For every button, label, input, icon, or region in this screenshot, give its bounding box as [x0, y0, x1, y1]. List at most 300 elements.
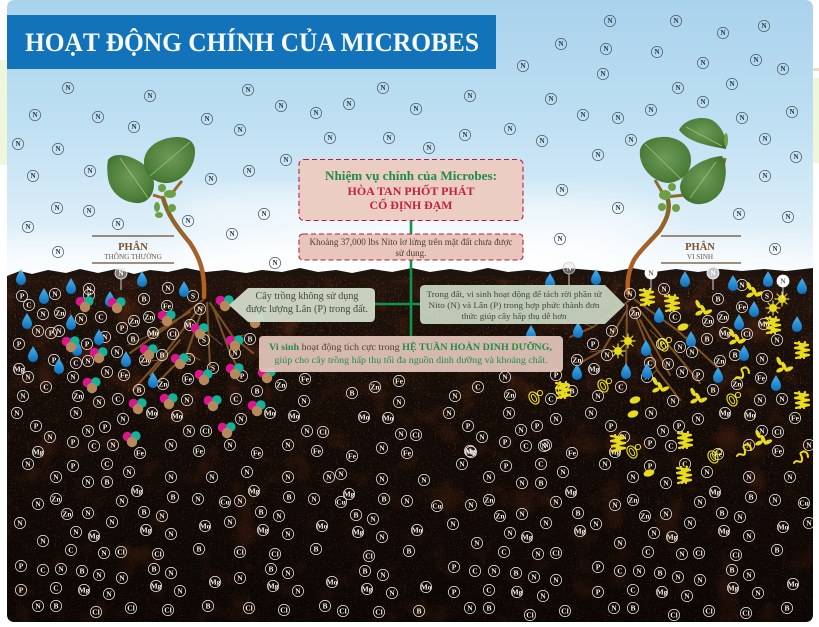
minerals in the soil: B — [715, 294, 721, 304]
minerals in the soil: N — [687, 518, 693, 528]
minerals in the soil: Zn — [276, 380, 286, 390]
minerals in the soil: C — [618, 382, 624, 392]
minerals in the soil: N — [746, 570, 752, 580]
minerals in the soil: N — [168, 472, 174, 482]
minerals in the soil: Cl — [705, 606, 713, 616]
minerals in the soil: N — [184, 396, 190, 404]
minerals in the soil: N — [70, 372, 76, 382]
minerals in the soil: Mg — [657, 588, 668, 596]
minerals in the soil: N — [679, 368, 685, 376]
nitrogen atoms in the sky: N — [327, 134, 333, 142]
nitrogen atoms in the sky: N — [761, 22, 767, 30]
minerals in the soil: B — [704, 334, 710, 344]
nitrogen atoms in the sky: N — [30, 172, 36, 180]
minerals in the soil: N — [611, 604, 617, 612]
minerals in the soil: N — [404, 496, 410, 506]
minerals in the soil: N — [78, 314, 84, 324]
minerals in the soil: N — [96, 398, 102, 406]
minerals in the soil: C — [682, 460, 688, 468]
minerals in the soil: N — [679, 550, 685, 558]
nitrogen atoms in the sky: N — [615, 114, 621, 122]
minerals in the soil: P — [554, 370, 559, 380]
left plant — [107, 137, 204, 297]
minerals in the soil: Cl — [271, 550, 279, 558]
minerals in the soil: P — [591, 340, 596, 348]
minerals in the soil: N — [56, 326, 62, 336]
minerals in the soil: N — [85, 478, 91, 486]
minerals in the soil: B — [130, 334, 136, 344]
minerals in the soil: Mo — [383, 414, 394, 422]
minerals in the soil: Mo — [778, 522, 789, 532]
minerals in the soil: C — [501, 548, 507, 556]
minerals in the soil: B — [732, 350, 738, 360]
minerals in the soil: N — [746, 472, 752, 482]
arrow callout: unused phosphorus: được lượng Lân (P) trong đất. — [246, 304, 368, 315]
minerals in the soil: N — [209, 472, 215, 482]
minerals in the soil: N — [540, 592, 546, 600]
nitrogen atoms in the sky: N — [413, 105, 419, 113]
nitrogen atoms in the sky: N — [558, 40, 564, 48]
minerals in the soil: Mg — [79, 586, 90, 594]
minerals in the soil: N — [604, 350, 610, 360]
minerals in the soil: N — [119, 496, 125, 506]
minerals in the soil: N — [543, 440, 549, 450]
minerals in the soil: Zn — [718, 312, 728, 322]
minerals in the soil: N — [519, 478, 525, 488]
callout: nutrient cycle — [259, 336, 563, 372]
nitrogen atoms in the sky: N — [87, 167, 93, 175]
nitrogen atoms in the sky: N — [313, 109, 319, 117]
nitrogen atoms in the sky: N — [283, 156, 289, 164]
minerals in the soil: Mg — [210, 578, 221, 586]
minerals in the soil: N — [47, 432, 53, 442]
minerals in the soil: Mg — [89, 532, 100, 540]
minerals in the soil: N — [553, 576, 559, 584]
minerals in the soil: N — [502, 372, 508, 382]
minerals in the soil: C — [26, 300, 32, 310]
callout: nutrient cycle: Vi sinh hoạt động tích cực trong HỆ TUẦN HOÀN DINH DƯỠNG, — [269, 340, 553, 353]
minerals in the soil: Cl — [202, 426, 210, 436]
minerals in the soil: Mg — [249, 486, 260, 496]
minerals in the soil: N — [58, 564, 64, 574]
minerals in the soil: S — [202, 336, 206, 344]
minerals in the soil: B — [247, 334, 253, 344]
minerals in the soil: P — [452, 588, 457, 596]
water droplets — [16, 269, 807, 391]
minerals in the soil: Cl — [339, 606, 347, 616]
minerals in the soil: B — [170, 492, 176, 502]
minerals in the soil: B — [575, 508, 581, 518]
minerals in the soil: S — [187, 354, 191, 364]
minerals in the soil: N — [101, 548, 107, 558]
minerals in the soil: Mo — [317, 522, 328, 530]
nitrogen atoms in the sky: N — [272, 259, 278, 267]
minerals in the soil: Mg — [566, 488, 577, 496]
minerals in the soil: Zn — [62, 510, 72, 518]
minerals in the soil: N — [697, 576, 703, 584]
minerals in the soil: N — [186, 426, 192, 436]
minerals in the soil: N — [389, 588, 395, 598]
minerals in the soil: Mg — [33, 448, 44, 456]
minerals in the soil: B — [313, 544, 319, 554]
minerals in the soil: Zn — [129, 316, 139, 326]
callout: main mission: CỐ ĐỊNH ĐẠM — [370, 197, 452, 212]
minerals in the soil: N — [737, 512, 743, 522]
nitrogen atoms in the sky: N — [780, 65, 786, 73]
minerals in the soil: N — [227, 518, 233, 526]
sky background — [0, 0, 819, 284]
minerals in the soil: P — [19, 586, 24, 594]
minerals in the soil: N — [380, 570, 386, 580]
minerals in the soil: P — [696, 370, 701, 380]
minerals in the soil: C — [630, 586, 636, 594]
minerals in the soil: Mo — [289, 412, 300, 420]
minerals in the soil: N — [295, 586, 301, 596]
minerals in the soil: Cl — [319, 428, 327, 436]
minerals in the soil: P — [452, 562, 457, 572]
minerals in the soil: Zn — [73, 392, 83, 400]
leaves — [107, 155, 154, 203]
soil ground — [7, 268, 813, 622]
minerals in the soil: B — [141, 508, 147, 516]
minerals in the soil: C — [40, 566, 46, 574]
nitrogen atoms in the sky: N — [86, 207, 92, 215]
minerals in the soil: C — [645, 548, 651, 556]
minerals in the soil: Mo — [200, 522, 211, 530]
minerals in the soil: Zn — [51, 494, 61, 504]
minerals in the soil: N — [660, 426, 666, 436]
minerals in the soil: Fe — [568, 448, 577, 458]
minerals in the soil: N — [663, 510, 669, 518]
minerals in the soil: Zn — [640, 512, 650, 520]
minerals in the soil: Cl — [169, 330, 177, 338]
minerals in the soil: B — [79, 566, 85, 576]
minerals in the soil: N — [474, 538, 480, 548]
callout: main mission: HÒA TAN PHỐT PHÁT — [348, 183, 474, 198]
nitrogen pins entering the soil: N — [780, 276, 786, 286]
minerals in the soil: N — [621, 432, 627, 442]
label: regular fertilizer — [92, 236, 174, 263]
minerals in the soil: Mg — [667, 532, 678, 542]
minerals in the soil: N — [665, 360, 671, 368]
minerals in the soil: N — [644, 372, 650, 382]
minerals in the soil: C — [68, 546, 74, 554]
minerals in the soil: P — [17, 340, 22, 348]
nitrogen atoms in the sky: N — [462, 131, 468, 139]
minerals in the soil: B — [205, 602, 211, 610]
minerals in the soil: N — [602, 460, 608, 468]
minerals in the soil: N — [20, 392, 26, 400]
minerals in the soil: N — [197, 304, 203, 314]
minerals in the soil: Mg — [610, 448, 621, 456]
buds — [658, 133, 728, 212]
minerals in the soil: B — [657, 568, 663, 578]
callout: main mission: Nhiệm vụ chính của Microbes: — [325, 168, 497, 183]
minerals in the soil: C — [548, 394, 554, 404]
minerals in the soil: Mo — [327, 578, 338, 586]
label: regular fertilizer: THÔNG THƯỜNG — [104, 251, 162, 261]
minerals in the soil: C — [475, 382, 481, 392]
nitrogen atoms in the sky: N — [95, 113, 101, 121]
nitrogen atoms in the sky: N — [54, 204, 60, 212]
minerals in the soil: N — [52, 290, 58, 298]
minerals in the soil: Cl — [742, 608, 750, 618]
minerals in the soil: N — [689, 348, 695, 356]
minerals in the soil: Mo — [412, 526, 423, 534]
minerals in the soil: N — [120, 414, 126, 424]
nitrogen atoms in the sky: N — [261, 210, 267, 218]
minerals in the soil: N — [338, 470, 344, 478]
minerals in the soil: C — [617, 566, 623, 576]
minerals in the soil: C — [672, 312, 678, 322]
minerals in the soil: N — [396, 398, 402, 406]
nitrogen atoms in the sky: N — [753, 56, 759, 64]
nitrogen atoms in the sky: N — [736, 210, 742, 218]
stem — [163, 198, 204, 297]
minerals in the soil: Fe — [253, 448, 262, 458]
minerals in the soil: Cu — [432, 502, 442, 510]
minerals in the soil: N — [518, 426, 524, 434]
minerals in the soil: N — [617, 538, 623, 548]
minerals in the soil: N — [806, 440, 812, 450]
minerals in the soil: N — [85, 356, 91, 366]
nitrogen atoms in the sky: N — [246, 167, 252, 175]
minerals in the soil: Mo — [759, 320, 770, 328]
minerals in the soil: N — [85, 508, 91, 518]
minerals in the soil: Zn — [628, 496, 638, 504]
nitrogen atoms in the sky: N — [720, 29, 726, 37]
minerals in the soil: N — [14, 408, 20, 418]
minerals in the soil: Cl — [365, 552, 373, 560]
minerals in the soil: N — [126, 468, 132, 476]
minerals in the soil: N — [507, 528, 513, 538]
minerals in the soil: Mg — [720, 328, 731, 338]
minerals in the soil: Zn — [715, 356, 725, 366]
nitrogen atoms in the sky: N — [675, 84, 681, 92]
minerals in the soil: Cl — [412, 430, 420, 440]
nitrogen atoms in the sky: N — [208, 175, 214, 183]
minerals in the soil: Mg — [466, 448, 477, 456]
minerals in the soil: Mo — [359, 412, 370, 422]
minerals in the soil: N — [446, 408, 452, 418]
minerals in the soil: N — [53, 472, 59, 482]
minerals in the soil: N — [661, 284, 667, 294]
nitrogen pins entering the soil: N — [118, 268, 124, 278]
minerals in the soil: Cl — [154, 550, 162, 558]
nitrogen atoms in the sky: N — [729, 80, 735, 88]
minerals in the soil: Cl — [127, 604, 135, 612]
minerals in the soil: N — [588, 408, 594, 418]
minerals in the soil: P — [20, 292, 25, 300]
minerals in the soil: B — [322, 602, 328, 610]
minerals in the soil: P — [71, 462, 76, 470]
minerals in the soil: P — [52, 356, 57, 364]
nitrogen atoms in the sky: N — [673, 17, 679, 25]
nitrogen atoms in the sky: N — [147, 92, 153, 100]
minerals in the soil: Mg — [720, 408, 731, 418]
minerals in the soil: N — [276, 512, 282, 520]
nitrogen atoms in the sky: N — [600, 70, 606, 78]
minerals in the soil: N — [301, 396, 307, 406]
minerals in the soil: N — [677, 342, 683, 352]
minerals in the soil: N — [17, 518, 23, 528]
minerals in the soil: C — [98, 312, 104, 322]
nitrogen atoms in the sky: N — [557, 235, 563, 243]
minerals in the soil: N — [285, 530, 291, 538]
minerals in the soil: N — [541, 442, 547, 450]
minerals in the soil: B — [268, 564, 274, 574]
minerals in the soil: N — [232, 348, 238, 358]
minerals in the soil: P — [596, 588, 601, 596]
minerals in the soil: B — [141, 294, 147, 304]
minerals in the soil: S — [765, 292, 769, 300]
minerals in the soil: N — [73, 528, 79, 536]
minerals in the soil: Zn — [484, 496, 494, 504]
minerals in the soil: N — [479, 432, 485, 442]
minerals in the soil: N — [237, 574, 243, 582]
minerals in the soil: C — [486, 586, 492, 594]
minerals in the soil: N — [326, 472, 332, 482]
minerals in the soil: Mg — [728, 584, 739, 592]
minerals in the soil: N — [630, 472, 636, 482]
minerals in the soil: P — [19, 562, 24, 570]
minerals in the soil: P — [120, 324, 125, 332]
minerals in the soil: N — [311, 494, 317, 504]
title banner — [7, 15, 496, 69]
minerals in the soil: C — [104, 460, 110, 468]
minerals in the soil: N — [759, 354, 765, 364]
minerals in the soil: Cu — [336, 498, 346, 506]
arrow callout: unused phosphorus: Cây trồng không sử dụng — [256, 291, 358, 302]
minerals in the soil: N — [177, 586, 183, 596]
minerals in the soil: Cl — [774, 428, 782, 436]
callout: nitrogen fact — [299, 234, 523, 260]
minerals in the soil: B — [258, 508, 264, 516]
minerals in the soil: Fe — [195, 446, 204, 456]
minerals in the soil: Fe — [163, 302, 172, 310]
minerals in the soil: N — [675, 572, 681, 582]
minerals in the soil: P — [240, 372, 245, 380]
minerals in the soil: N — [114, 348, 120, 356]
minerals in the soil: B — [513, 568, 519, 578]
arrow callout: microbes split compounds: Nito (N) và Lân (P) trong hợp phức thành đơn — [428, 300, 600, 310]
minerals in the soil: N — [119, 574, 125, 582]
nitrogen atoms in the sky: N — [739, 114, 745, 122]
nitrogen atoms in the sky: N — [65, 84, 71, 92]
nitrogen atoms in the sky: N — [131, 123, 137, 131]
minerals in the soil: Mg — [268, 582, 279, 590]
minerals in the soil: N — [627, 290, 633, 298]
nitrogen atoms in the sky: N — [772, 245, 778, 253]
minerals in the soil: B — [774, 546, 780, 554]
label: microbial fertilizer — [661, 236, 741, 263]
minerals in the soil: Mg — [589, 364, 600, 374]
nitrogen atoms in the sky: N — [762, 135, 768, 143]
minerals in the soil: Zn — [144, 312, 154, 322]
nitrogen atoms in the sky: N — [580, 111, 586, 119]
minerals in the soil: N — [670, 396, 676, 406]
minerals in the soil: N — [379, 444, 385, 452]
minerals in the soil: B — [569, 386, 575, 396]
minerals in the soil: P — [503, 438, 508, 446]
minerals in the soil: N — [746, 532, 752, 540]
nitrogen atoms in the sky: N — [648, 106, 654, 114]
minerals in the soil: N — [506, 408, 512, 418]
minerals in the soil: N — [168, 440, 174, 450]
minerals in the soil: B — [538, 478, 544, 488]
nitrogen pins entering the soil: N — [648, 268, 654, 278]
nitrogen atoms in the sky: N — [762, 172, 768, 180]
yellow microbes on the right — [527, 281, 809, 483]
minerals in the soil: B — [159, 350, 165, 360]
nitrogen atoms in the sky: N — [426, 144, 432, 152]
minerals in the soil: B — [710, 386, 716, 394]
minerals in the soil: B — [719, 508, 725, 518]
minerals in the soil: Mg — [575, 526, 586, 536]
minerals in the soil: N — [531, 572, 537, 582]
minerals in the soil: Mg — [141, 526, 152, 534]
title banner: HOẠT ĐỘNG CHÍNH CỦA MICROBES — [25, 28, 479, 57]
nitrogen atoms in the sky: N — [237, 126, 243, 134]
minerals in the soil: N — [787, 472, 793, 482]
minerals in the soil: N — [35, 326, 41, 336]
minerals in the soil: B — [151, 564, 157, 574]
minerals in the soil: N — [612, 500, 618, 510]
minerals in the soil: N — [535, 550, 541, 558]
minerals in the soil: C — [43, 382, 49, 392]
nitrogen atoms in the sky: N — [55, 248, 61, 256]
minerals in the soil: N — [304, 426, 310, 436]
minerals in the soil: N — [519, 510, 525, 518]
minerals in the soil: N — [452, 392, 458, 400]
minerals in the soil: N — [165, 284, 171, 292]
nitrogen atoms in the sky: N — [115, 220, 121, 228]
minerals in the soil: P — [596, 562, 601, 572]
minerals in the soil: Mo — [148, 328, 159, 338]
buds — [154, 184, 176, 218]
minerals in the soil: Fe — [136, 448, 145, 458]
minerals in the soil: Mg — [151, 582, 162, 590]
minerals in the soil: Cl — [92, 608, 100, 616]
minerals in the soil: Fe — [791, 414, 800, 422]
nitrogen pins entering the soil: N — [566, 264, 572, 272]
minerals in the soil: B — [362, 566, 368, 576]
minerals in the soil: N — [237, 496, 243, 506]
right plant — [628, 118, 728, 293]
minerals in the soil: N — [663, 478, 669, 488]
minerals in the soil: Mo — [147, 408, 158, 418]
minerals in the soil: C — [668, 442, 674, 450]
minerals in the soil: Zn — [703, 316, 713, 326]
minerals in the soil: P — [609, 422, 614, 430]
label: microbial fertilizer: PHÂN — [685, 241, 715, 253]
minerals in the soil: Mo — [745, 410, 756, 420]
roots of left plant — [128, 300, 253, 390]
nitrogen atoms in the sky: N — [539, 137, 545, 145]
minerals in the soil: B — [254, 386, 260, 396]
nitrogen atoms in the sky: N — [245, 86, 251, 94]
nitrogen pins entering the soil — [115, 262, 789, 298]
nitrogen atoms in the sky: N — [628, 136, 634, 144]
minerals in the soil: Mg — [258, 526, 269, 534]
minerals in the soil: N — [25, 372, 31, 382]
minerals in the soil: N — [25, 460, 31, 468]
minerals in the soil: Fe — [120, 370, 129, 380]
minerals in the soil: Cl — [743, 330, 751, 338]
minerals in the soil: Mo — [788, 580, 799, 588]
minerals in the soil: P — [535, 422, 540, 430]
nitrogen atoms in the sky: N — [520, 62, 526, 70]
